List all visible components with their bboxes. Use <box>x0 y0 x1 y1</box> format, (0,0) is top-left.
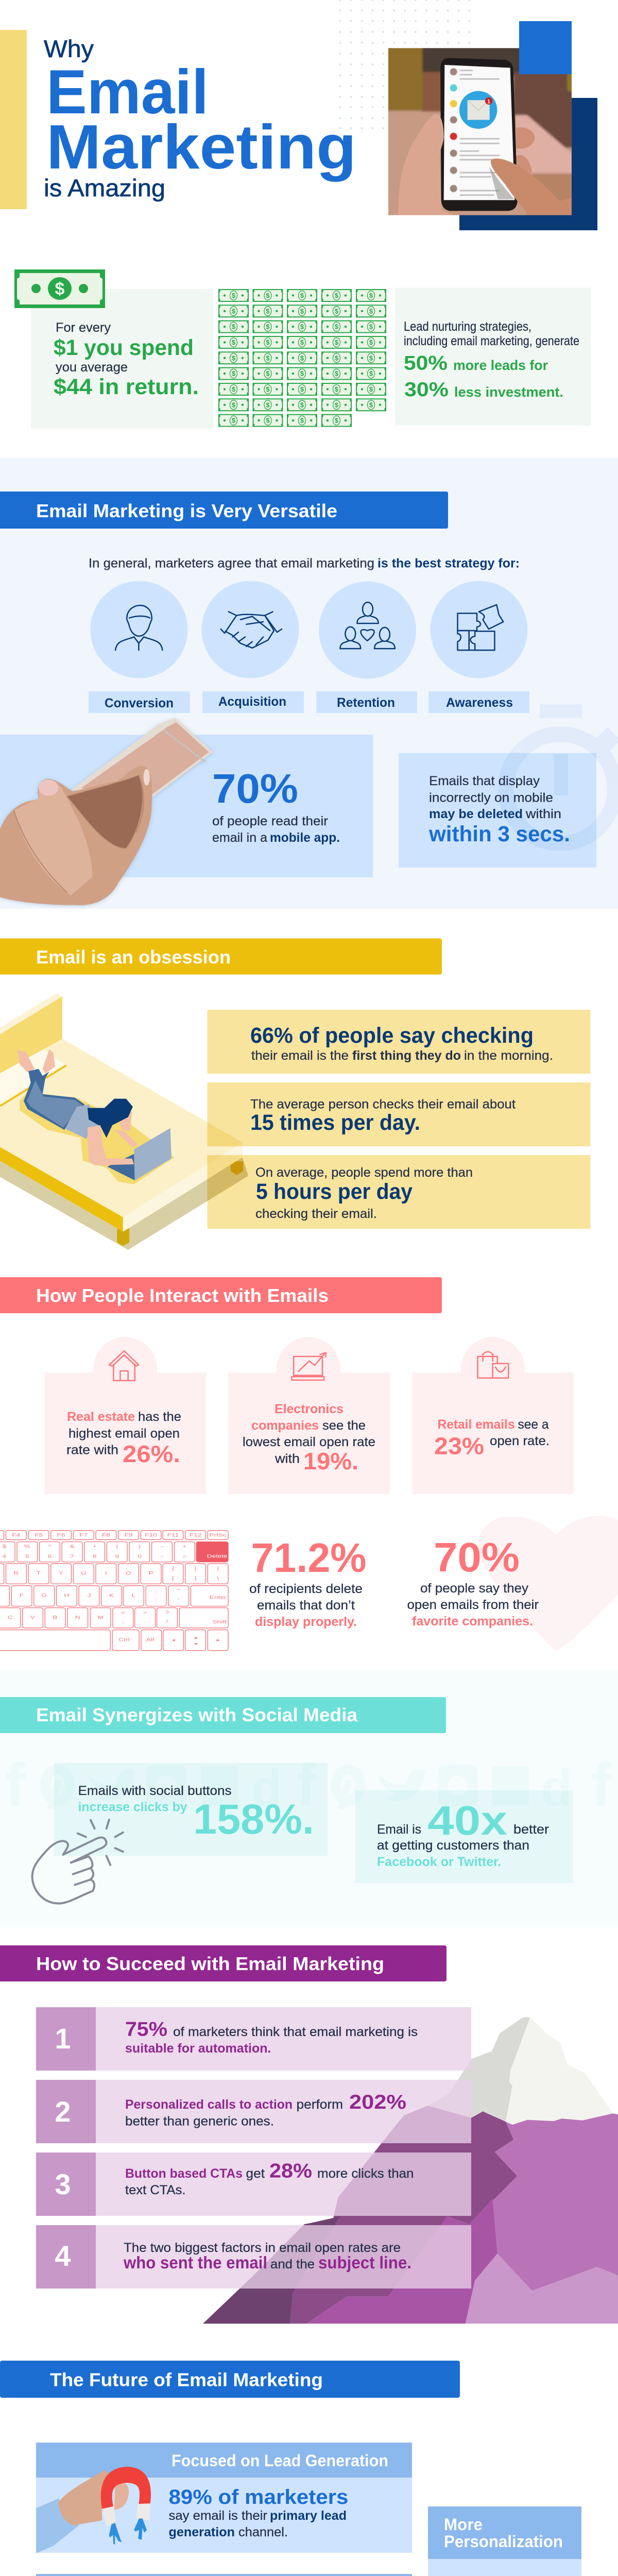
heading bar: Email Marketing is Very Versatile <box>36 500 337 521</box>
illustration: keyboard with delete key: F8 <box>102 1532 110 1538</box>
card: lead generation: Focused on Lead Generation <box>171 2451 388 2470</box>
illustration: keyboard with delete key: F6 <box>57 1532 65 1538</box>
illustration: keyboard with delete key: ^ <box>48 1544 52 1549</box>
text: for every $1: you average <box>56 360 128 375</box>
text: deleted within 3 secs: may be deleted <box>429 807 523 821</box>
text: deleted within 3 secs: incorrectly on mobile <box>429 790 553 805</box>
row 3 <box>36 2153 471 2216</box>
social icon watermark row: d <box>251 1759 282 1817</box>
icon grid: 44 dollar bills: $$$$$ <box>232 292 373 299</box>
section background <box>0 1671 618 1927</box>
section: how to succeed <box>0 1945 618 2324</box>
illustration: keyboard with delete key: ? <box>165 1610 169 1615</box>
card: electronics: with <box>274 1452 300 1466</box>
illustration: keyboard with delete key: F4 <box>12 1532 21 1538</box>
labels: four strategy names <box>89 691 529 713</box>
illustration: keyboard with delete key: Alt <box>146 1637 154 1642</box>
illustration: keyboard with delete key: " <box>177 1588 180 1594</box>
title: Marketing <box>46 112 356 182</box>
text: deleted within 3 secs: within <box>525 807 561 821</box>
text: 158% clicks <box>78 1784 314 1843</box>
row 2: 2 <box>55 2095 71 2128</box>
yellow accent bar <box>0 30 27 209</box>
card: real estate <box>44 1337 206 1494</box>
text: deleted within 3 secs: Emails that display <box>429 774 540 788</box>
illustration: keyboard with delete key: J <box>88 1593 91 1598</box>
photo: hand holding phone with email notification: 1 <box>487 98 490 105</box>
stat: 70% favorite companies: 70% <box>434 1534 520 1580</box>
illustration: keyboard with delete key: – <box>160 1544 164 1549</box>
text: lead nurturing stats <box>404 319 579 401</box>
illustration: keyboard with delete key: ( <box>116 1544 118 1549</box>
panel: 70% mobile app <box>0 735 373 877</box>
illustration: keyboard with delete key: ) <box>139 1544 141 1549</box>
icon: conversion <box>91 581 187 678</box>
illustration: keyboard with delete key: PrtSc <box>209 1532 227 1538</box>
card: more personalization: More <box>444 2515 483 2534</box>
illustration: keyboard with delete key: 8 <box>93 1554 97 1560</box>
text: 66% statistic: in the morning. <box>464 1048 553 1063</box>
section background <box>0 457 618 909</box>
card: lead generation <box>36 2443 412 2553</box>
illustration: keyboard with delete key: 4 <box>3 1554 7 1560</box>
illustration: keyboard with delete key: \ <box>217 1576 219 1581</box>
illustration: keyboard with delete key <box>0 1531 228 1651</box>
card: electronics <box>228 1337 390 1494</box>
heading bar: How to Succeed with Email Marketing <box>36 1953 384 1974</box>
illustration: keyboard with delete key: | <box>217 1566 219 1571</box>
icon grid: 44 dollar bills: $$$$$ <box>232 307 373 315</box>
text: lead nurturing stats: including email marketing, generate <box>404 334 579 348</box>
section: ROI money <box>14 269 591 429</box>
illustration: keyboard with delete key: R <box>13 1570 19 1576</box>
illustration: keyboard with delete key: ] <box>195 1576 197 1581</box>
illustration: keyboard with delete key: : <box>155 1588 157 1594</box>
icon grid: 44 dollar bills: $$$$ <box>232 417 339 425</box>
text: for every $1: $1 you spend <box>54 335 194 360</box>
illustration: keyboard with delete key: C <box>8 1615 13 1620</box>
text: 15 times statistic: 15 times per day. <box>250 1110 420 1135</box>
text: 70% read email in mobile app: 70% <box>212 766 298 811</box>
illustration: keyboard with delete key: . <box>144 1619 146 1624</box>
text: lead nurturing stats: Lead nurturing strategies, <box>404 319 531 334</box>
labels: four strategy names: Acquisition <box>218 694 286 709</box>
text: 40x better: Email is <box>377 1822 421 1837</box>
illustration: keyboard with delete key: Enter <box>210 1595 227 1600</box>
illustration: keyboard with delete key: ▾ <box>194 1641 198 1647</box>
text: lead nurturing stats: more leads for <box>453 358 548 373</box>
illustration: keyboard with delete key: K <box>109 1593 114 1598</box>
navy backdrop square <box>459 98 597 230</box>
row 2 <box>36 2080 471 2143</box>
panel: for every dollar <box>31 289 213 429</box>
card: more personalization: Personalization <box>444 2532 563 2551</box>
row 3: get <box>246 2166 265 2181</box>
card: retail: Retail emails <box>438 1417 515 1432</box>
illustration: keyboard with delete key: B <box>53 1615 58 1620</box>
illustration: keyboard with delete key: 0 <box>138 1554 142 1560</box>
illustration: keyboard with delete key: Delete <box>207 1554 228 1559</box>
illustration: keyboard with delete key: , <box>122 1619 124 1624</box>
card: more personalization <box>422 2506 581 2576</box>
icon grid: 44 dollar bills: $$$$$ <box>232 370 373 378</box>
card: lead generation: generation <box>169 2525 235 2539</box>
heading bar <box>0 1697 446 1733</box>
heading bar: Email Synergizes with Social Media <box>36 1704 358 1725</box>
icon: heart watermark <box>478 1516 618 1651</box>
section: header <box>0 0 597 230</box>
panel: social buttons <box>54 1763 328 1856</box>
text: 40x better: better <box>513 1822 549 1837</box>
stat: 70% favorite companies: of people say they <box>420 1581 529 1596</box>
icon grid: 44 dollar bills: $$$$$ <box>232 338 373 346</box>
icon grid: 44 dollar bills: $$$$$ <box>232 323 373 331</box>
text: 66% statistic: their email is the <box>251 1048 349 1063</box>
illustration: keyboard with delete key: 7 <box>70 1554 74 1560</box>
illustration: keyboard with delete key: F12 <box>190 1532 201 1538</box>
panel: display on mobile <box>399 753 596 868</box>
row 1: suitable for automation. <box>125 2041 271 2056</box>
section: versatile <box>0 457 618 909</box>
illustration: keyboard with delete key: ▸ <box>217 1637 220 1642</box>
row 3: 3 <box>55 2168 71 2200</box>
illustration: keyboard with delete key: 9 <box>115 1554 119 1560</box>
illustration: keyboard with delete key: F9 <box>124 1532 133 1538</box>
icon: laptop with rising chart <box>291 1353 326 1380</box>
photo: hand holding phone <box>0 718 213 905</box>
stat: 71.2% delete emails: emails that don’t <box>257 1598 355 1613</box>
row 4: who sent the email <box>123 2253 267 2272</box>
row 2: Personalized calls to action <box>125 2097 293 2112</box>
illustration: keyboard with delete key: - <box>161 1554 163 1560</box>
title: Why <box>44 35 94 62</box>
card: lead generation: 89% of marketers <box>169 2486 348 2509</box>
heading bar: How People Interact with Emails <box>36 1285 329 1306</box>
section: how people interact <box>0 1277 618 1651</box>
background dot grid <box>339 0 471 129</box>
panel: 66% check first thing <box>207 1010 590 1074</box>
photo: hand holding phone with email notification <box>386 46 577 218</box>
illustration: keyboard with delete key: • <box>93 1544 96 1549</box>
icon grid: 44 dollar bills: $$$$$ <box>232 401 373 409</box>
card: lead generation: channel. <box>238 2525 288 2539</box>
text: lead nurturing stats: less investment. <box>454 384 563 400</box>
illustration: keyboard with delete key: ' <box>178 1598 179 1603</box>
blue accent square <box>519 21 572 74</box>
illustration: keyboard with delete key: F11 <box>167 1532 179 1538</box>
illustration: keyboard with delete key: F5 <box>35 1532 43 1538</box>
icon grid: 44 dollar bills: $$$$$ <box>232 385 373 393</box>
panel: 5 hours per day <box>207 1155 590 1229</box>
illustration: keyboard with delete key: Ctrl <box>118 1637 130 1642</box>
stat: 71.2% delete emails: display properly. <box>255 1615 357 1629</box>
row 2: better than generic ones. <box>125 2114 274 2129</box>
social icon watermark row <box>5 1751 612 1819</box>
icon: acquisition handshake <box>202 581 299 678</box>
labels: four strategy names: Awareness <box>446 696 513 710</box>
stat: 71.2% delete emails <box>249 1535 367 1629</box>
text: 66% statistic <box>250 1023 553 1063</box>
text: 40x better: Facebook or Twitter. <box>377 1855 502 1869</box>
illustration: keyboard with delete key: V <box>30 1615 35 1620</box>
section: social media <box>0 1671 618 1927</box>
labels: four strategy names: Retention <box>337 696 395 710</box>
icon: stopwatch watermark <box>498 704 618 851</box>
text: 158% clicks: 158%. <box>193 1796 314 1843</box>
row 4: subject line. <box>318 2253 411 2272</box>
labels: four strategy names: Conversion <box>105 696 174 710</box>
card: retail: see a <box>518 1417 549 1432</box>
heading bar: Email is an obsession <box>36 946 231 968</box>
illustration: keyboard with delete key: { <box>172 1566 174 1571</box>
card: electronics: lowest email open rate <box>243 1435 375 1449</box>
social icon watermark row: f <box>5 1751 26 1819</box>
heading bar <box>0 939 442 975</box>
icon grid: 44 dollar bills <box>218 289 386 427</box>
icon grid: 44 dollar bills: $$$$$ <box>232 354 373 362</box>
illustration: keyboard with delete key: F10 <box>145 1532 158 1538</box>
row 1 <box>36 2007 471 2071</box>
text: 5 hours statistic: checking their email. <box>255 1207 377 1221</box>
illustration: keyboard with delete key: ◂ <box>171 1637 175 1642</box>
text: 158% clicks: Emails with social buttons <box>78 1784 232 1798</box>
text: 70% read email in mobile app <box>212 766 340 845</box>
text: 5 hours statistic <box>255 1165 473 1221</box>
row 4: The two biggest factors in email open rates are <box>124 2241 401 2255</box>
row 2: perform <box>297 2097 343 2112</box>
text: 70% read email in mobile app: email in a <box>212 831 267 845</box>
social icon watermark row: f <box>296 1751 317 1819</box>
illustration: keyboard with delete key: % <box>24 1544 30 1549</box>
card: real estate: highest email open <box>68 1426 180 1440</box>
card: electronics: Electronics <box>274 1402 344 1416</box>
text: 15 times statistic <box>250 1097 516 1135</box>
icon: clicking hand <box>32 1820 123 1904</box>
heading bar <box>0 1277 442 1313</box>
heading bar: The Future of Email Marketing <box>50 2369 323 2391</box>
stat: 70% favorite companies: favorite companies. <box>412 1614 533 1629</box>
row 1: 1 <box>55 2022 71 2055</box>
section: obsession <box>0 939 590 1250</box>
card: lead generation: say email is their <box>169 2509 267 2523</box>
intro text <box>89 556 520 571</box>
illustration: keyboard with delete key: U <box>81 1570 86 1576</box>
row 4 <box>36 2225 471 2289</box>
row 4: and the <box>270 2257 315 2272</box>
row 1: 75% <box>125 2019 167 2040</box>
illustration: keyboard with delete key: F <box>20 1593 24 1598</box>
card: electronics: see the <box>322 1418 366 1433</box>
illustration: keyboard with delete key: Y <box>59 1570 63 1576</box>
intro text: In general, marketers agree that email marketing <box>89 556 374 571</box>
stat: 71.2% delete emails: of recipients delete <box>249 1582 363 1596</box>
card: retail: open rate. <box>490 1434 550 1448</box>
illustration: keyboard with delete key: $ <box>3 1544 7 1549</box>
heading bar <box>0 1945 447 1981</box>
text: deleted within 3 secs: within 3 secs. <box>428 822 570 846</box>
card: retail <box>412 1337 574 1494</box>
card: electronics: 19%. <box>303 1448 358 1475</box>
illustration: keyboard with delete key: P <box>149 1570 153 1576</box>
stat: 70% favorite companies: open emails from their <box>407 1598 539 1612</box>
text: for every $1 <box>54 320 199 399</box>
illustration: keyboard with delete key: L <box>132 1593 136 1598</box>
text: 40x better: at getting customers than <box>377 1838 529 1853</box>
card: real estate: 26%. <box>123 1440 180 1467</box>
icon: retention group <box>319 581 416 679</box>
illustration: keyboard with delete key: M <box>97 1615 104 1620</box>
social icon watermark row: f <box>591 1751 612 1819</box>
text: 70% read email in mobile app: mobile app. <box>270 831 340 845</box>
illustration: mountain <box>203 2018 618 2324</box>
icon: large dollar bill <box>14 269 105 308</box>
text: lead nurturing stats: 50% <box>404 352 448 374</box>
illustration: keyboard with delete key: [ <box>172 1576 175 1581</box>
icon: house <box>109 1351 139 1381</box>
illustration: keyboard with delete key: 5 <box>25 1554 29 1560</box>
panel: lead nurturing <box>395 287 591 426</box>
row 3: 28% <box>269 2160 312 2182</box>
illustration: keyboard with delete key: T <box>37 1570 41 1576</box>
illustration: keyboard with delete key: I <box>105 1570 107 1576</box>
row 1: of marketers think that email marketing is <box>173 2025 418 2039</box>
card: electronics: companies <box>251 1418 319 1433</box>
text: 66% statistic: first thing they do <box>352 1048 461 1063</box>
title: Email <box>46 57 209 127</box>
text: 66% statistic: 66% of people say checking <box>250 1023 534 1048</box>
photo: hand with magnet attracting people <box>36 2470 150 2553</box>
row 3: text CTAs. <box>125 2183 185 2197</box>
text: for every $1: $44 in return. <box>54 375 199 399</box>
card: real estate: rate with <box>66 1443 118 1457</box>
text: 15 times statistic: The average person checks their email about <box>250 1097 516 1112</box>
text: 40x better: 40x <box>427 1798 507 1843</box>
illustration: keyboard with delete key: ; <box>155 1598 157 1603</box>
row 3: Button based CTAs <box>125 2166 243 2181</box>
illustration: keyboard with delete key: & <box>70 1544 75 1549</box>
icon: large dollar bill: $ <box>55 279 65 299</box>
heading bar <box>0 492 448 529</box>
illustration: keyboard with delete key: O <box>126 1570 131 1576</box>
illustration: keyboard with delete key: 6 <box>48 1554 52 1560</box>
text: 70% read email in mobile app: of people read their <box>212 814 328 828</box>
card: retail: 23% <box>434 1432 484 1459</box>
text: lead nurturing stats: 30% <box>404 379 449 401</box>
text: 5 hours statistic: On average, people spend more than <box>255 1165 473 1180</box>
icon: awareness puzzle <box>431 581 527 678</box>
illustration: keyboard with delete key: Shift <box>213 1619 227 1625</box>
title: is Amazing <box>44 174 165 201</box>
intro text: is the best strategy for: <box>377 556 520 571</box>
illustration: keyboard with delete key: + <box>182 1544 186 1549</box>
heading bar <box>0 2361 460 2398</box>
text: 158% clicks: increase clicks by <box>78 1800 187 1815</box>
row 3: more clicks than <box>317 2166 414 2181</box>
text: for every $1: For every <box>56 320 111 335</box>
text: deleted within 3 secs <box>428 774 570 846</box>
stat: 71.2% delete emails: 71.2% <box>251 1535 367 1581</box>
illustration: keyboard with delete key: / <box>166 1619 168 1624</box>
illustration: woman on bed with laptop <box>0 993 248 1250</box>
text: 5 hours statistic: 5 hours per day <box>256 1179 413 1204</box>
illustration: keyboard with delete key: G <box>41 1593 47 1598</box>
illustration: keyboard with delete key: } <box>194 1566 197 1571</box>
illustration: keyboard with delete key: < <box>121 1610 125 1615</box>
panel: 15 times per day <box>207 1082 590 1146</box>
card: list segmentation <box>36 2574 412 2576</box>
illustration: keyboard with delete key: = <box>182 1554 186 1560</box>
illustration: keyboard with delete key: ▴ <box>194 1635 198 1640</box>
illustration: keyboard with delete key: N <box>75 1615 80 1620</box>
panel: 40x better <box>355 1790 573 1883</box>
card: real estate: has the <box>138 1410 181 1424</box>
illustration: keyboard with delete key: H <box>64 1593 69 1598</box>
card: real estate: Real estate <box>67 1410 135 1424</box>
card: lead generation: primary lead <box>270 2509 347 2523</box>
illustration: keyboard with delete key: F7 <box>79 1532 88 1538</box>
icon: shopping bags <box>478 1352 508 1378</box>
social icon watermark row: d <box>541 1759 572 1817</box>
section: future <box>0 2361 581 2576</box>
illustration: keyboard with delete key: > <box>143 1610 147 1615</box>
title <box>44 35 356 201</box>
text: 40x better <box>377 1798 549 1869</box>
row 2: 202% <box>349 2091 406 2113</box>
row 4: 4 <box>55 2240 71 2272</box>
stat: 70% favorite companies <box>407 1534 539 1629</box>
